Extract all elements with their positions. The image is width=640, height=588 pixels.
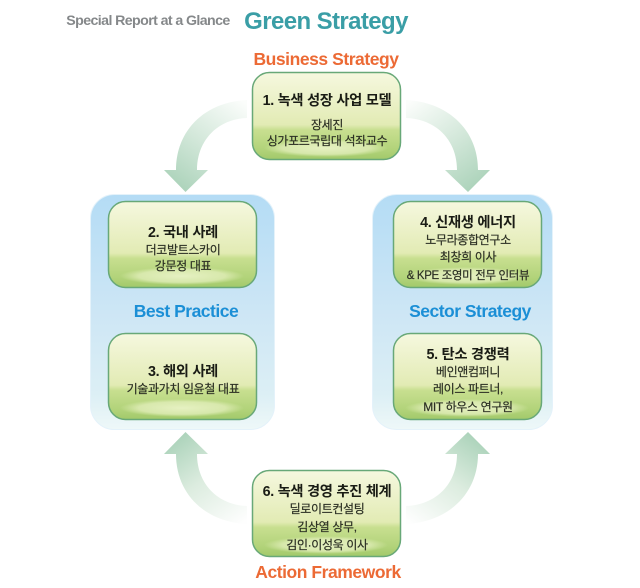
box 4 title: 4. 신재생 에너지 (420, 214, 516, 231)
box 3 text: 기술과가치 임윤철 대표 (127, 382, 240, 396)
box 5 text: 베인앤컴퍼니 (436, 365, 500, 379)
box 1 text: 장세진 (311, 118, 343, 132)
box 2 text: 더코발트스카이 (146, 243, 220, 257)
box 1: business model (252, 72, 400, 160)
box 1 text: 싱가포르국립대 석좌교수 (267, 134, 388, 148)
arrow: bottom left (164, 432, 247, 524)
box 6 text: 딜로이트컨설팅 (290, 502, 364, 516)
arrow: top left (164, 100, 247, 192)
box 4 text: 최창희 이사 (440, 250, 497, 264)
box 5 text: MIT 하우스 연구원 (423, 400, 513, 414)
arrow: bottom right (406, 432, 490, 524)
box 6 title: 6. 녹색 경영 추진 체계 (263, 483, 391, 500)
box 5 title: 5. 탄소 경쟁력 (427, 346, 509, 363)
box 5: carbon competitiveness (394, 334, 542, 420)
box 6: green management (252, 470, 400, 556)
box 2: domestic cases (108, 202, 256, 288)
box 2 text: 강문정 대표 (155, 259, 212, 273)
title: Green Strategy: Green Strategy (244, 8, 409, 35)
heading: Business Strategy: Business Strategy (253, 49, 399, 69)
heading: Action Framework: Action Framework (255, 562, 401, 582)
panel: Best Practice (90, 194, 274, 430)
box 3 title: 3. 해외 사례 (148, 363, 218, 380)
box 4: renewable energy (394, 202, 542, 288)
box 4 text: & KPE 조영미 전무 인터뷰 (407, 269, 529, 282)
heading: Sector Strategy: Sector Strategy (409, 301, 532, 321)
box 6 text: 김상열 상무, (297, 520, 357, 534)
arrow: top right (406, 100, 490, 192)
box 4 text: 노무라종합연구소 (425, 233, 511, 247)
title: Special Report at a Glance: Special Report at a Glance (66, 13, 230, 29)
box 1 title: 1. 녹색 성장 사업 모델 (263, 92, 392, 109)
box 5 text: 레이스 파트너, (433, 382, 503, 396)
box 6 text: 김인·이성욱 이사 (286, 538, 368, 552)
panel: Sector Strategy (372, 194, 552, 430)
box 3: overseas cases (108, 334, 256, 420)
box 2 title: 2. 국내 사례 (148, 224, 218, 241)
heading: Best Practice: Best Practice (134, 301, 239, 321)
